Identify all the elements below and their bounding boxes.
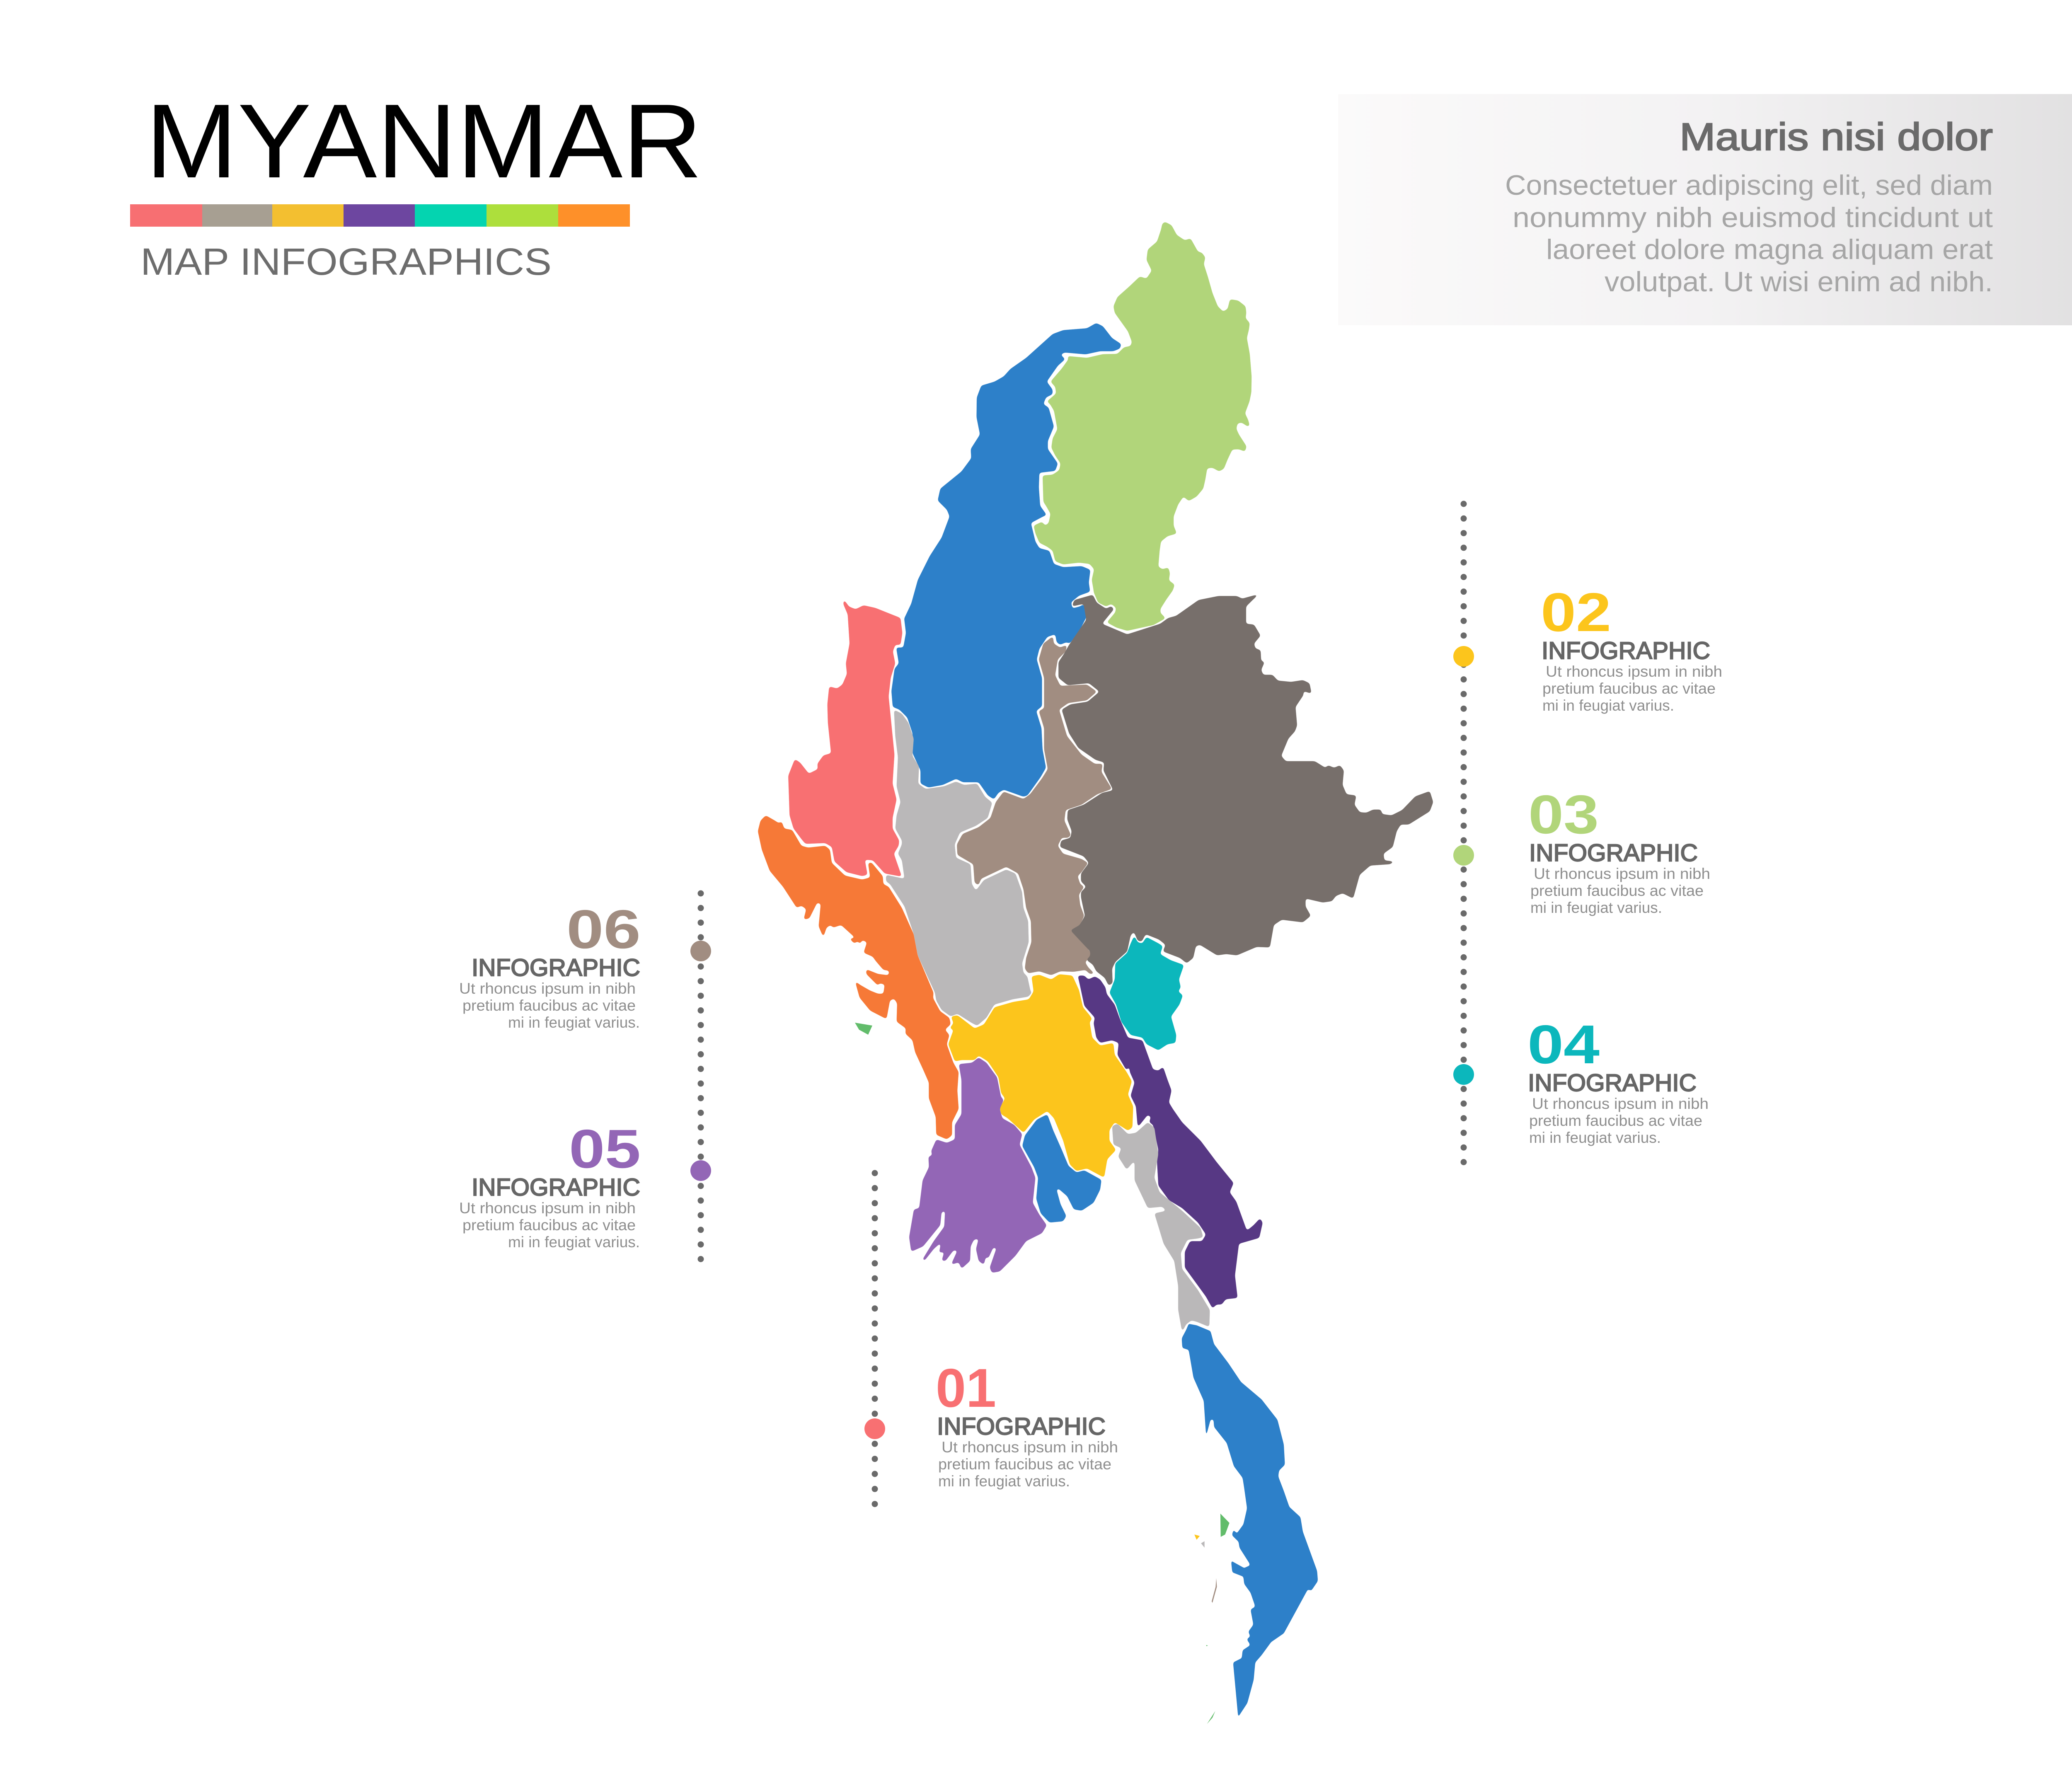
callout 03: [1528, 784, 1710, 916]
callout 03: Ut rhoncus ipsum in nibh: [1534, 865, 1710, 882]
callout 06: 06: [566, 899, 641, 960]
callout 03: mi in feugiat varius.: [1530, 899, 1662, 916]
region: teal: [1109, 936, 1184, 1050]
marker 03: [1453, 845, 1474, 866]
callout 05: Ut rhoncus ipsum in nibh: [459, 1200, 636, 1217]
callout 02: [1541, 582, 1722, 714]
region: north blue: [891, 323, 1121, 799]
marker 05: [690, 1160, 711, 1181]
marker 01: [864, 1418, 885, 1439]
callout 06: INFOGRAPHIC: [472, 954, 640, 981]
panel body text: Consectetuer adipiscing elit, sed diam: [1505, 169, 1993, 201]
callout 05: [459, 1118, 641, 1251]
callout 05: pretium faucibus ac vitae: [462, 1217, 636, 1234]
small islands: [855, 1023, 1230, 1724]
callout 01: [936, 1357, 1118, 1490]
dotted leader: right: [1460, 504, 1467, 1166]
region: blue south centre: [1022, 1114, 1101, 1223]
region: grey south coast: [1112, 1122, 1210, 1332]
region: tan centre: [957, 636, 1112, 975]
region: north green: [1034, 222, 1251, 631]
region: salmon west: [788, 599, 903, 877]
callout 04: 04: [1527, 1014, 1600, 1075]
callout 05: INFOGRAPHIC: [472, 1174, 640, 1201]
callout 01: 01: [936, 1357, 996, 1418]
region: orange coast: [758, 815, 959, 1140]
marker 06: [690, 941, 711, 961]
panel body text: [1505, 169, 1993, 298]
panel: intro text: [1338, 94, 2072, 325]
callout 04: INFOGRAPHIC: [1528, 1069, 1697, 1096]
region: yellow: [948, 974, 1133, 1178]
callout 05: 05: [569, 1118, 641, 1179]
callout 04: pretium faucibus ac vitae: [1529, 1112, 1702, 1129]
region: dark purple: [1078, 975, 1263, 1309]
panel body text: nonummy nibh euismod tincidunt ut: [1513, 202, 1993, 233]
callout 06: mi in feugiat varius.: [508, 1014, 640, 1031]
callout 01: INFOGRAPHIC: [937, 1413, 1106, 1440]
callout 02: Ut rhoncus ipsum in nibh: [1546, 663, 1722, 680]
callout 02: 02: [1541, 582, 1611, 643]
callout 02: mi in feugiat varius.: [1542, 697, 1674, 714]
callout 04: mi in feugiat varius.: [1529, 1129, 1661, 1146]
subtitle: MAP INFOGRAPHICS: [140, 241, 552, 283]
panel body text: laoreet dolore magna aliquam erat: [1546, 234, 1993, 265]
callout 03: pretium faucibus ac vitae: [1530, 882, 1704, 899]
callout 06: pretium faucibus ac vitae: [462, 997, 636, 1014]
callout 02: pretium faucibus ac vitae: [1542, 680, 1716, 697]
dotted leader: left: [698, 893, 704, 1263]
callout 06: [459, 899, 641, 1031]
panel body text: volutpat. Ut wisi enim ad nibh.: [1605, 266, 1993, 298]
dotted leader: centre: [872, 1173, 878, 1505]
callout 04: Ut rhoncus ipsum in nibh: [1532, 1095, 1709, 1112]
callout 01: Ut rhoncus ipsum in nibh: [942, 1439, 1118, 1456]
callout 04: [1527, 1014, 1709, 1146]
callout 05: mi in feugiat varius.: [508, 1234, 640, 1251]
colour bar: [130, 204, 630, 227]
panel heading: Mauris nisi dolor: [1680, 115, 1993, 158]
marker 04: [1453, 1064, 1474, 1085]
callout 03: INFOGRAPHIC: [1529, 840, 1698, 866]
callout 01: mi in feugiat varius.: [938, 1473, 1070, 1490]
region: light purple delta: [909, 1057, 1047, 1273]
region: blue far south: [1182, 1324, 1318, 1717]
callout 01: pretium faucibus ac vitae: [938, 1456, 1111, 1473]
title: MYANMAR: [145, 82, 702, 200]
callout 03: 03: [1528, 784, 1599, 845]
region: light grey centre: [886, 710, 1033, 1026]
callout 02: INFOGRAPHIC: [1542, 637, 1710, 664]
region: dark grey east: [1058, 594, 1433, 986]
callout 06: Ut rhoncus ipsum in nibh: [459, 980, 636, 997]
map of Myanmar: [758, 222, 1433, 1724]
marker 02: [1453, 646, 1474, 667]
